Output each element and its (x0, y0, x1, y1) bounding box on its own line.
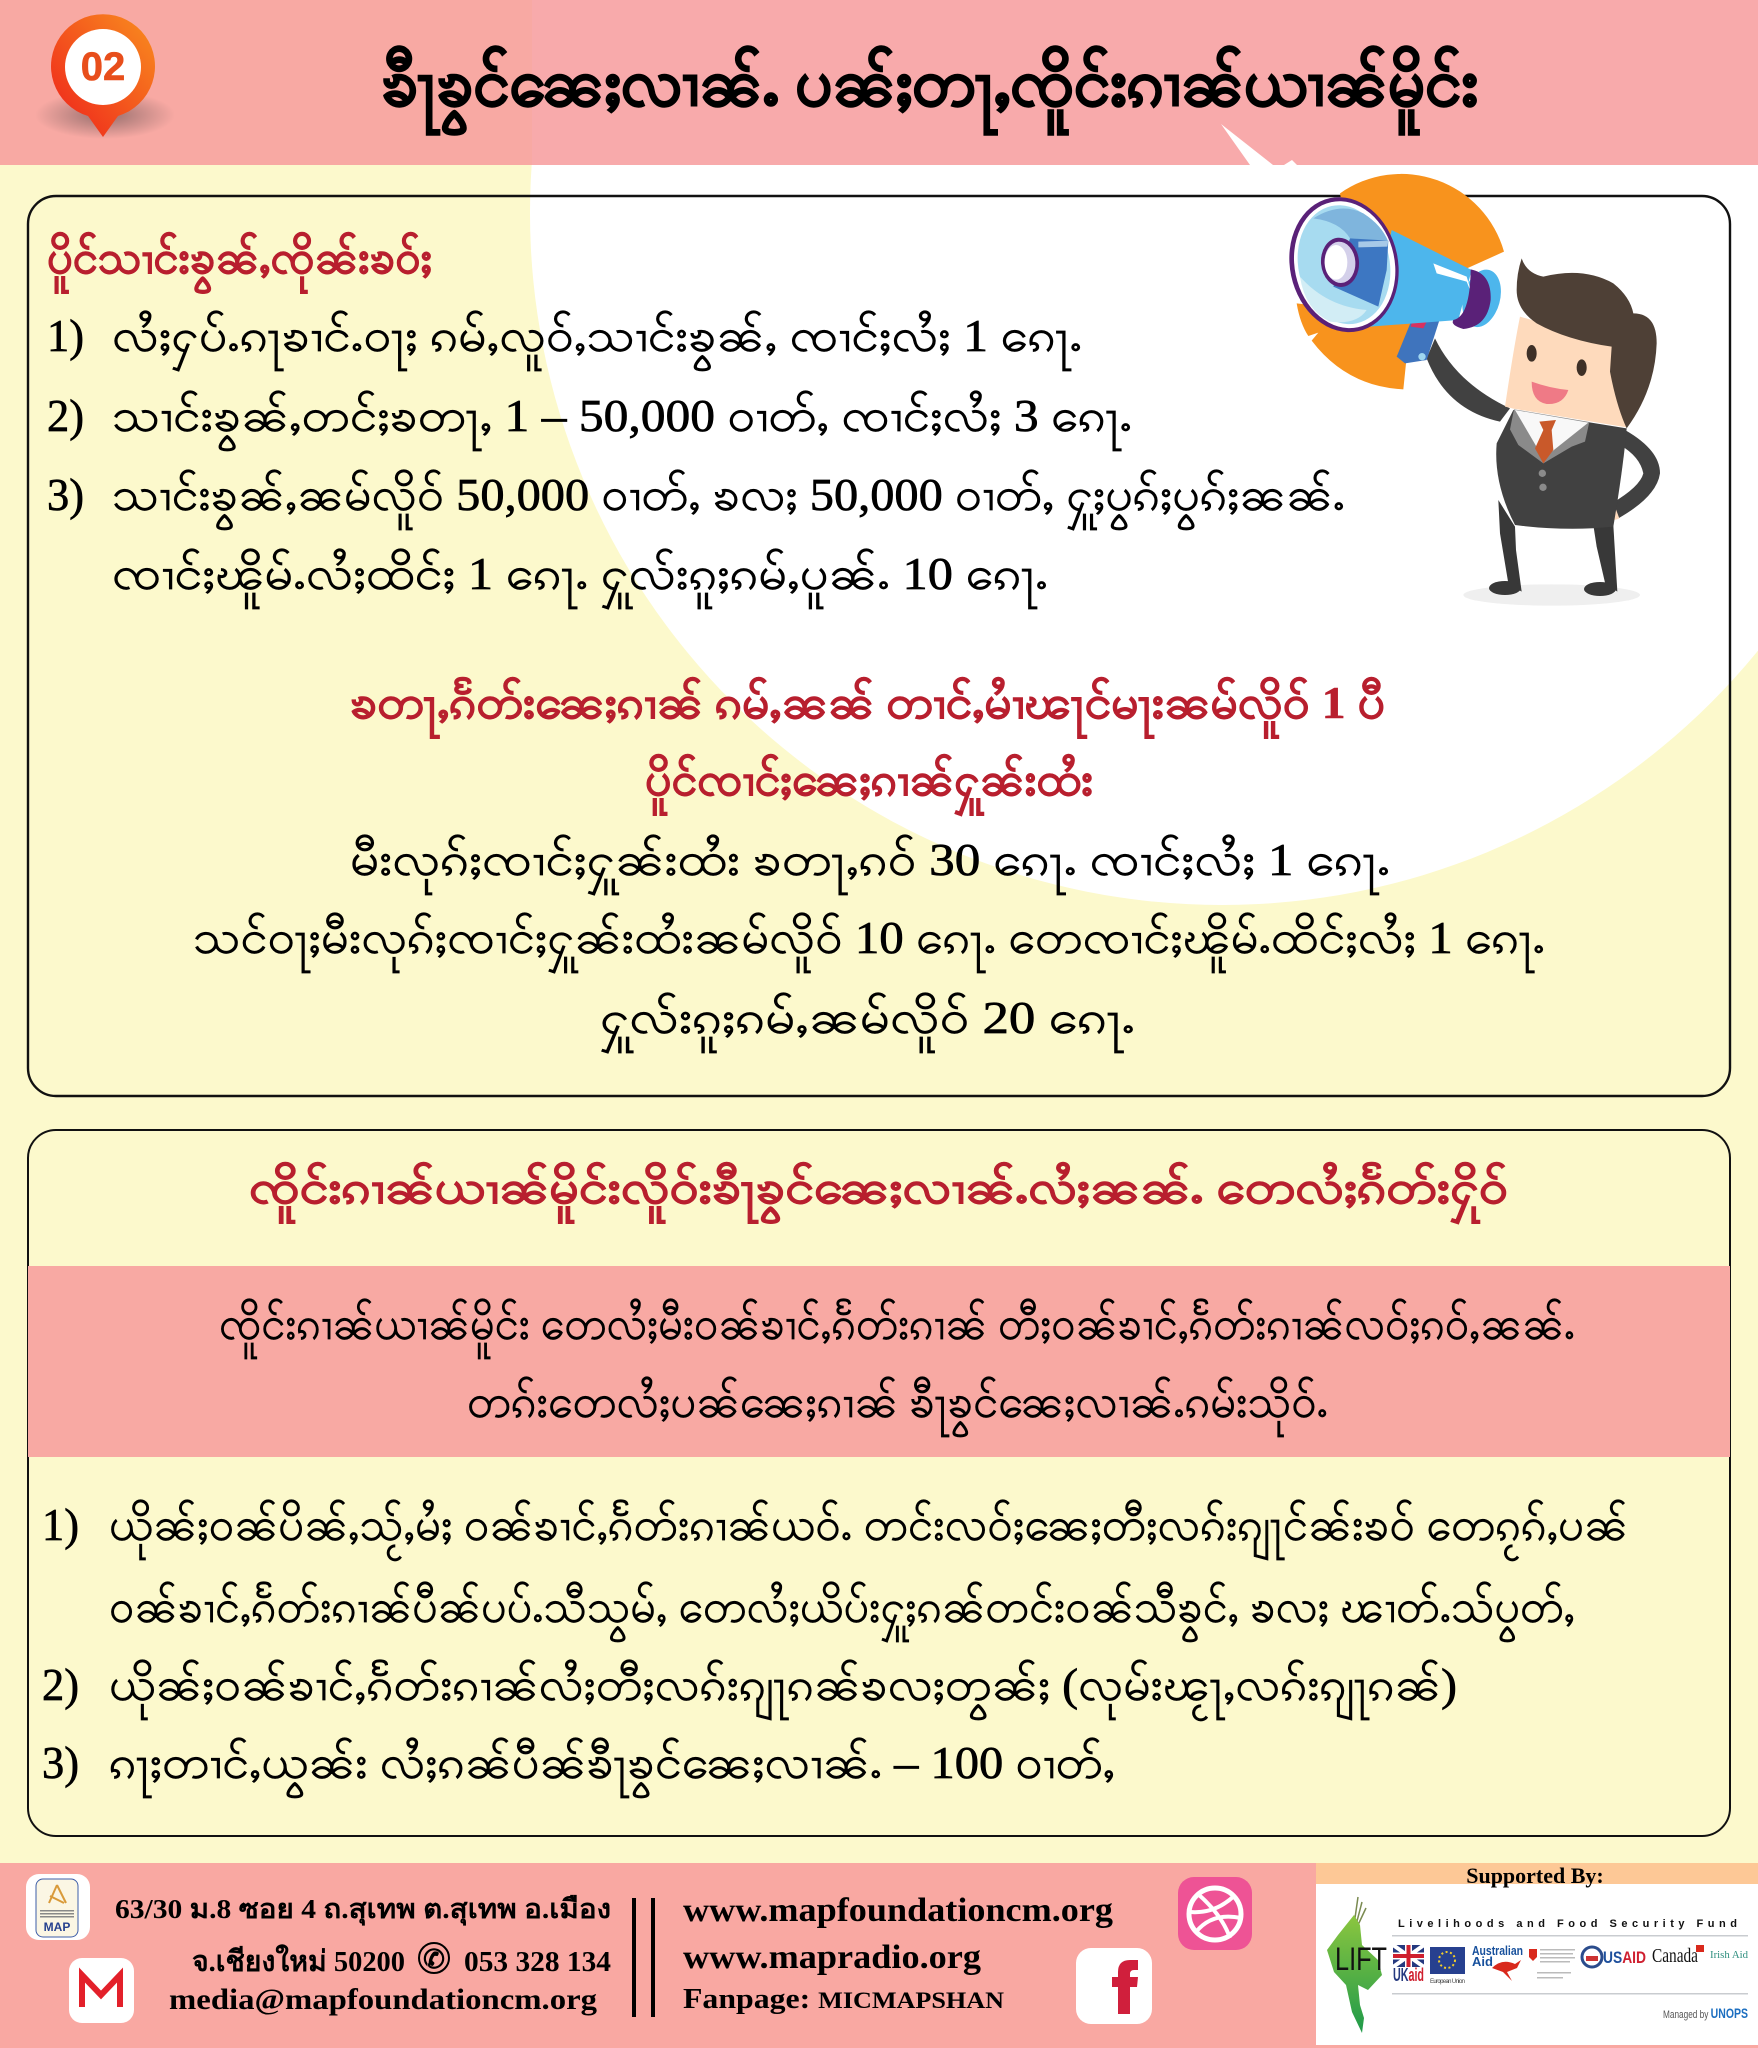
pink band with conditions (28, 1266, 1730, 1457)
panel: rules and eligibility (28, 196, 1730, 1096)
footer web links: Fanpage: MICMAPSHAN (683, 1984, 1004, 2015)
logo: Canada: Canada (1652, 1945, 1698, 1967)
list item 1: ဝၼ်ၶၢင်ႇၵႅတ်းၵၢၼ်ပီၼ်ပပ်ႉသီသွမ်ႇ တေလႆႈယိပ်းႁူႈၵၼ်တင်းဝၼ်သီၶွင်ႇ ၶလႈ ၽၢတ်ႉသ်ပွတ်ႇ (109, 1580, 1575, 1644)
list item 2: သၢင်းၶွၼ်ႇတင်ႈၶတႃႇ 1 – 50,000 ဝၢတ်ႇ ၸၢင်ႈလႆႈ 3 ၵေႃႉ (112, 389, 1132, 452)
panel: supporters (1316, 1863, 1758, 2045)
footer address: media@mapfoundationcm.org (169, 1983, 597, 2016)
logo: UNOPS: Managed by UNOPS (1663, 2005, 1748, 2021)
icon: telephone: ✆ (423, 1945, 445, 1974)
red notice: ၶတႃႇၵႅတ်းၼေႈၵၢၼ် ၵမ်ႇၼၼ် တၢင်ႇမၢႆၽႃင်မႃးၼမ်လိူဝ် 1 ပီ (350, 675, 1385, 740)
list item 2: 2) (47, 390, 84, 441)
icon: gmail (69, 1958, 134, 2023)
heading: how to apply: ၸိူင်းၵၢၼ်ယၢၼ်မိူင်းလိူဝ်းၶီႃၶွင်ၼေႈလၢၼ်ႉလႆႈၼၼ်ႉ တေလႆႈၵႅတ်းႁိုဝ် (249, 1160, 1508, 1225)
logo: UK aid: UKaid (1393, 1965, 1424, 1985)
pink band with conditions: တၵ်းတေလႆႈပၼ်ၼေႈၵၢၼ် ၶီႃၶွင်ၼေႈလၢၼ်ႉၵမ်းသိုဝ်ႉ (467, 1375, 1328, 1438)
icon: number 02 map pin (35, 14, 175, 139)
title: ၶီႃၶွင်ၼေႈလၢၼ်ႉ ပၼ်ႈတႃႇၸိူင်းၵၢၼ်ယၢၼ်မိူင်း (381, 44, 1478, 136)
list item 1: 1) (42, 1499, 79, 1550)
logo: UK aid (1393, 1945, 1424, 1985)
footer address: 63/30 ม.8 ซอย 4 ถ.สุเทพ ต.สุเทพ อ.เมือง (115, 1894, 611, 1926)
logo: USAID (1582, 1947, 1646, 1967)
heading: rules: ပိူင်သၢင်းၶွၼ်ႇၸိုၼ်းၶဝ်ႈ (47, 230, 432, 295)
list item 3: 3) (42, 1737, 79, 1788)
icon: telephone (419, 1943, 449, 1974)
footer web links: www.mapradio.org (683, 1939, 981, 1976)
footer web links (683, 1892, 1113, 2015)
pink band with conditions: ၸိူင်းၵၢၼ်ယၢၼ်မိူင်း တေလႆႈမီးဝၼ်ၶၢင်ႇၵႅတ်းၵၢၼ် တီႈဝၼ်ၶၢင်ႇၵႅတ်းၵၢၼ်လဝ်ႈၵဝ်ႇၼၼ်ႉ (219, 1297, 1575, 1360)
footer web links: www.mapfoundationcm.org (683, 1892, 1113, 1929)
centered conditions: သင်ဝႃႈမီးလုၵ်ႈၸၢင်ႈႁူၼ်းထႆးၼမ်လိူဝ် 10 ၵေႃႉ တေၸၢင်ႈၽိူမ်ႉထိင်ႈလႆႈ 1 ၵေႃႉ (193, 911, 1545, 975)
footer band (0, 1863, 1758, 2048)
icon: MAP Foundation logo (26, 1874, 90, 1940)
illustration: businessman with megaphone (1277, 174, 1660, 606)
icon: MAP Foundation logo: MAP (44, 1920, 70, 1934)
centered conditions (193, 833, 1545, 1055)
panel: project requirements (28, 1130, 1730, 1836)
icon: dribbble (1178, 1877, 1252, 1950)
logo: European Union: European Union (1430, 1979, 1465, 1985)
list item 1 (47, 309, 1082, 373)
supporters heading: Supported By: (1466, 1863, 1604, 1888)
centered conditions: ႁူလ်းၵူႈၵမ်ႇၼမ်လိူဝ် 20 ၵေႃႉ (600, 991, 1135, 1055)
logo: USAID: USAID (1603, 1948, 1646, 1967)
list item 1: ယိုၼ်ႈဝၼ်ပိၼ်ႇသႂ်ႇမႆႈ ဝၼ်ၶၢင်ႇၵႅတ်းၵၢၼ်ယဝ်ႉ တင်းလဝ်ႈၼေႈတီႈလၵ်းၵျႃင်ၼ်းၶဝ် တေၵႂၵ်ႇပၼ် (109, 1498, 1628, 1561)
logo: Swiss cooperation (1529, 1949, 1575, 1978)
list item 3: သၢင်းၶွၼ်ႇၼမ်လိူဝ် 50,000 ဝၢတ်ႇ ၶလႈ 50,000 ဝၢတ်ႇ ႁူႈပွၵ်ႈပွၵ်ႈၼၼ်ႉ (112, 468, 1345, 532)
logo: LIFT map (1327, 1897, 1387, 2033)
header band (0, 0, 1758, 165)
list item 2: 2) (42, 1659, 79, 1710)
list item 3: ၵႃႈတၢင်ႇယွၼ်း လႆႈၵၼ်ပီၼ်ၶီႃၶွင်ၼေႈလၢၼ်ႉ – 100 ဝၢတ်ႇ (109, 1736, 1115, 1799)
footer address (115, 1894, 611, 2016)
list item 1: 1) (47, 310, 84, 361)
logo: Irish Aid: Irish Aid (1710, 1950, 1748, 1961)
footer address: จ.เชียงใหม่ 50200 (192, 1944, 405, 1978)
logo: Australian Aid: Aid (1472, 1954, 1493, 1969)
list item 1 (42, 1498, 1628, 1644)
divider (632, 1898, 655, 2017)
list item 3 (47, 468, 1345, 611)
logo: Australian Aid: Australian (1472, 1943, 1523, 1958)
red subheading: ပိူင်ၸၢင်ႈၼေႈၵၢၼ်ႁူၼ်းထႆး (645, 752, 1093, 817)
icon: facebook (1076, 1948, 1152, 2024)
fund name: Livelihoods and Food Security Fund (1398, 1918, 1737, 1930)
logo: Australian Aid (1472, 1943, 1523, 1981)
list item 3: ၸၢင်ႈၽိူမ်ႉလႆႈထိင်ႈ 1 ၵေႃႉ ႁူလ်းၵူႈၵမ်ႇပူၼ်ႉ 10 ၵေႃႉ (112, 547, 1048, 611)
icon: number 02 map pin: 02 (81, 45, 125, 89)
logo: LIFT map: LIFT (1335, 1941, 1387, 1977)
list item 1: လႆႈႁပ်ႉၵႃၶၢင်ႉဝႃႈ ၵမ်ႇလူဝ်ႇသၢင်းၶွၼ်ႇ ၸၢင်ႈလႆႈ 1 ၵေႃႉ (112, 309, 1082, 373)
list item 2: ယိုၼ်ႈဝၼ်ၶၢင်ႇၵႅတ်းၵၢၼ်လႆႈတီႈလၵ်းၵျႃၵၼ်ၶလႈတွၼ်ႈ (လုမ်းၽႂႃႇလၵ်းၵျႃၵၼ်) (109, 1658, 1457, 1721)
centered conditions: မီးလုၵ်ႈၸၢင်ႈႁူၼ်းထႆး ၶတႃႇၵဝ် 30 ၵေႃႉ ၸၢင်ႈလႆႈ 1 ၵေႃႉ (350, 833, 1390, 897)
logo: European Union (1430, 1947, 1465, 1985)
rules (1392, 1935, 1748, 1994)
list item 3: 3) (47, 469, 84, 520)
footer address: 053 328 134 (464, 1946, 611, 1978)
